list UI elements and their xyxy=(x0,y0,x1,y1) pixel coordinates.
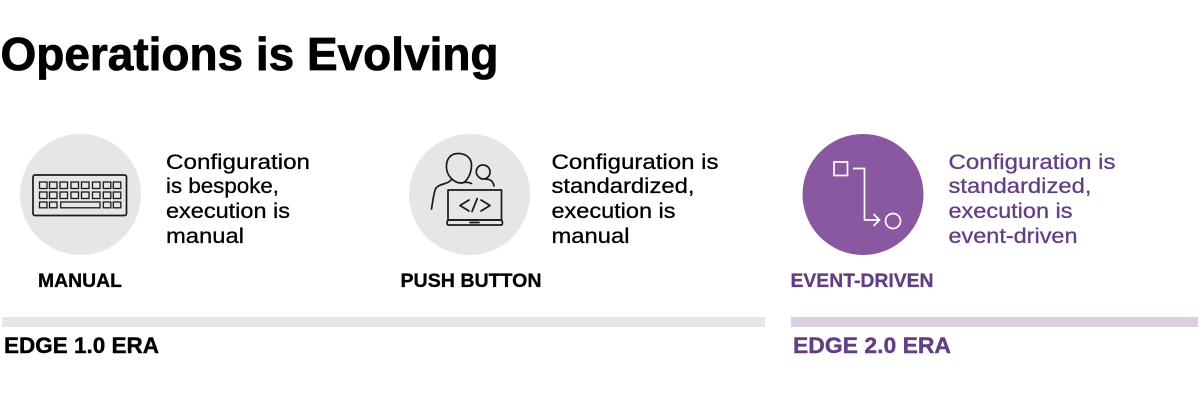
text: manual description: is bespoke, xyxy=(166,174,279,198)
text: manual description: execution is xyxy=(166,199,290,223)
bar: edge 2.0 xyxy=(791,317,1198,327)
icon: keyboard xyxy=(20,134,141,255)
label: edge 1.0 era: EDGE 1.0 ERA xyxy=(4,333,159,358)
text: push button description: execution is xyxy=(552,199,676,223)
text: push button description: Configuration is xyxy=(552,150,718,174)
icon: people with laptop xyxy=(409,134,530,255)
text: event-driven description: event-driven xyxy=(948,224,1078,248)
label: event-driven: EVENT-DRIVEN xyxy=(790,270,934,292)
icon: flow from square to circle xyxy=(802,134,924,255)
title: Operations is Evolving xyxy=(0,28,498,80)
era: edge 1.0 xyxy=(2,317,765,358)
text: event-driven description: standardized, xyxy=(948,174,1092,198)
text: event-driven description: execution is xyxy=(948,199,1072,223)
label: manual: MANUAL xyxy=(38,270,122,292)
panel: manual xyxy=(20,134,310,292)
label: edge 2.0 era: EDGE 2.0 ERA xyxy=(793,333,951,358)
bar: edge 1.0 xyxy=(2,317,765,327)
text: manual description: Configuration xyxy=(166,150,310,174)
panel: event-driven xyxy=(790,134,1116,292)
era: edge 2.0 xyxy=(791,317,1198,358)
text: event-driven description: Configuration is xyxy=(948,150,1116,174)
panel: push button xyxy=(400,134,718,292)
text: push button description: standardized, xyxy=(552,174,694,198)
text: manual description: manual xyxy=(166,224,244,248)
text: push button description: manual xyxy=(552,224,630,248)
label: push button: PUSH BUTTON xyxy=(400,270,542,292)
